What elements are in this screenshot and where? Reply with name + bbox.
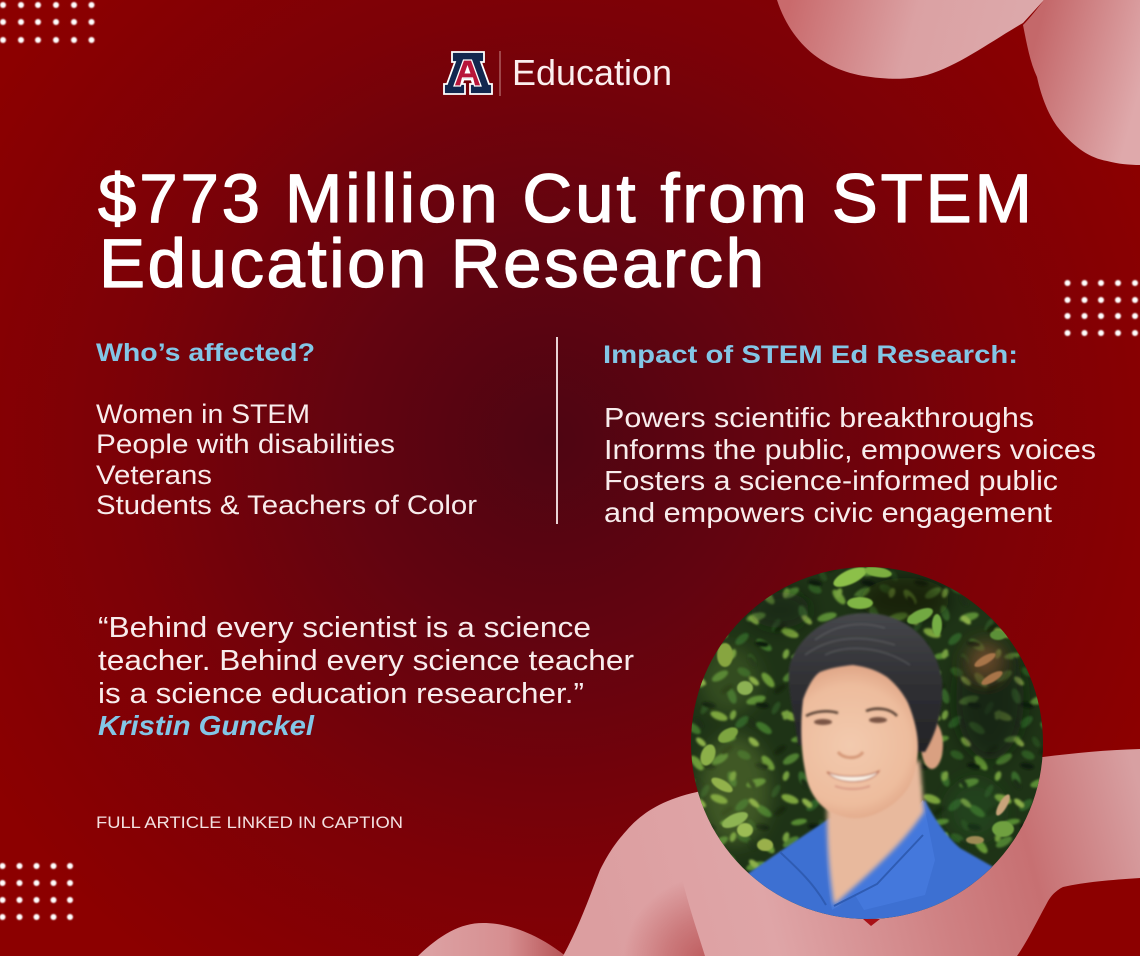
logo: University of Arizona Education <box>444 51 672 96</box>
dot grid: bottom left <box>0 863 73 920</box>
list: affected groups: People with disabilities <box>96 429 395 459</box>
logo divider <box>500 51 501 96</box>
list: impacts <box>604 402 1096 528</box>
dot grid: top left <box>0 2 94 43</box>
title <box>98 160 1032 302</box>
ear <box>921 721 943 769</box>
quote text: teacher. Behind every science teacher <box>98 645 634 677</box>
column divider <box>556 337 558 524</box>
list: affected groups: Women in STEM <box>96 399 310 429</box>
quote attribution: Kristin Gunckel <box>98 710 315 741</box>
list: impacts: Fosters a science-informed public <box>604 465 1058 496</box>
list: affected groups: Students & Teachers of Color <box>96 490 477 520</box>
list: impacts: Informs the public, empowers voices <box>604 434 1096 465</box>
title: $773 Million Cut from STEM <box>98 160 1032 237</box>
neck <box>827 760 924 905</box>
list: affected groups: Veterans <box>96 460 212 490</box>
quote text <box>98 612 634 710</box>
quote <box>98 612 634 741</box>
hair back <box>789 613 942 752</box>
logo wordmark: Education <box>512 52 672 93</box>
foliage background <box>690 563 1044 920</box>
face <box>801 665 918 818</box>
title: Education Research <box>99 225 764 302</box>
decorative ribbon: bottom right <box>418 743 1140 956</box>
collar shade <box>834 835 923 906</box>
caption note: FULL ARTICLE LINKED IN CAPTION <box>96 813 403 832</box>
list: impacts: Powers scientific breakthroughs <box>604 402 1034 433</box>
quote text: is a science education researcher.” <box>98 678 584 710</box>
dot grid: right <box>1064 280 1138 336</box>
heading: who's affected: Who’s affected? <box>96 339 315 367</box>
quote text: “Behind every scientist is a science <box>98 612 591 644</box>
portrait photo: Kristin Gunckel <box>690 563 1044 925</box>
hair highlights <box>805 624 910 665</box>
panel: impact of STEM Ed research <box>603 341 1096 528</box>
icon: block A <box>444 52 492 94</box>
decorative ribbon: top right <box>777 0 1140 165</box>
list: impacts: and empowers civic engagement <box>604 497 1052 528</box>
face features <box>806 709 897 789</box>
shirt <box>746 800 1000 925</box>
red notch under photo <box>863 919 880 926</box>
list: affected groups <box>96 399 477 520</box>
panel: who's affected <box>96 339 477 520</box>
heading: impact: Impact of STEM Ed Research: <box>603 341 1018 369</box>
